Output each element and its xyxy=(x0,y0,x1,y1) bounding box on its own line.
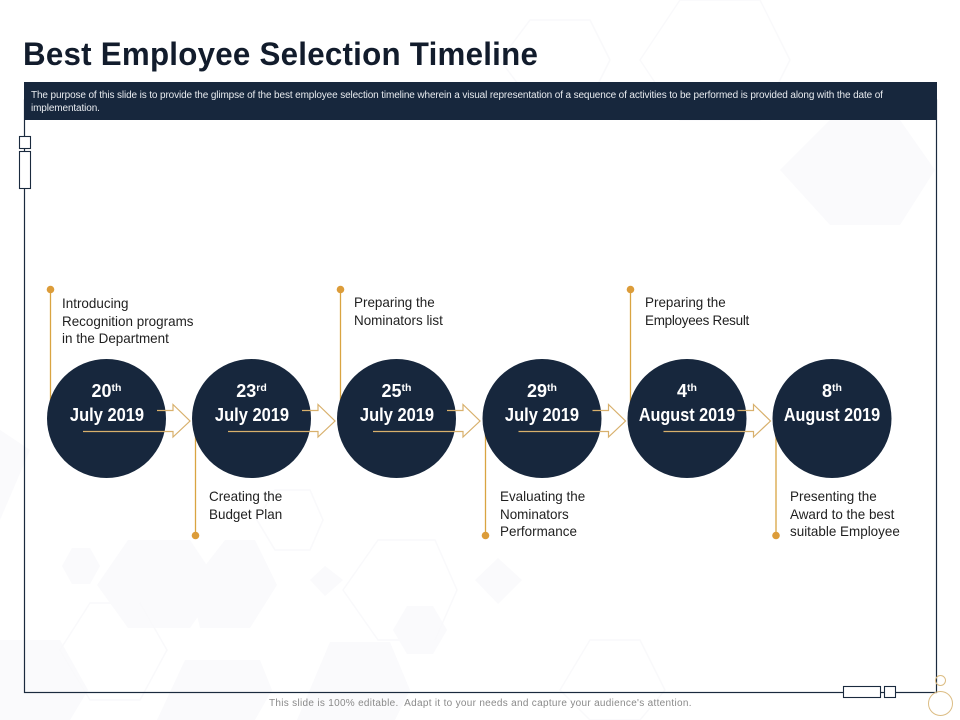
date 4: July 2019 xyxy=(505,405,579,425)
arrow 4 xyxy=(518,404,626,437)
footer note: This slide is 100% editable. Adapt it to your needs and capture your audience's attention. xyxy=(269,698,692,709)
step text 2: Creating the xyxy=(209,488,282,504)
date 1 xyxy=(69,381,144,425)
step text 1: Introducing xyxy=(62,295,129,311)
date 3 xyxy=(359,381,434,425)
step text 5 xyxy=(645,294,750,328)
date 6 xyxy=(784,381,880,425)
step text 5: Employees Result xyxy=(645,312,749,328)
date 5: August 2019 xyxy=(639,405,735,425)
date 4 xyxy=(505,381,579,425)
step text 2 xyxy=(209,488,282,522)
date 6: August 2019 xyxy=(784,405,880,425)
marker 1 xyxy=(47,286,54,405)
step text 2: Budget Plan xyxy=(209,506,282,522)
date 5: 4th xyxy=(677,381,697,401)
date 6: 8th xyxy=(822,381,842,401)
date 2: July 2019 xyxy=(214,405,289,425)
step text 1: Recognition programs xyxy=(62,313,193,329)
marker 5 xyxy=(627,286,634,405)
date 3: July 2019 xyxy=(359,405,434,425)
date 4: 29th xyxy=(527,381,557,401)
step text 6: Presenting the xyxy=(790,488,877,504)
circle 3 xyxy=(337,359,456,478)
circle 6 xyxy=(772,359,892,478)
circle 1 xyxy=(47,359,166,478)
step text 1: in the Department xyxy=(62,330,169,346)
title: Best Employee Selection Timeline xyxy=(23,36,538,72)
step text 1 xyxy=(62,295,193,346)
step text 4: Evaluating the xyxy=(500,488,585,504)
step text 4 xyxy=(500,488,585,539)
arrow 3 xyxy=(373,404,480,437)
step text 6: suitable Employee xyxy=(790,523,900,539)
step text 3: Preparing the xyxy=(354,294,435,310)
marker 2 xyxy=(192,430,199,539)
description banner: The purpose of this slide is to provide the glimpse of the best employee selection timeline wherein a visual representation of a sequence of activities to be performed is provided along with the date of xyxy=(31,90,883,101)
arrow 5 xyxy=(664,404,770,437)
date 3: 25th xyxy=(382,381,411,401)
arrow 1 xyxy=(83,404,190,437)
description banner xyxy=(24,82,937,120)
step text 3 xyxy=(354,294,443,328)
circle 5 xyxy=(628,359,746,478)
step text 6 xyxy=(790,488,900,539)
marker 6 xyxy=(772,430,780,539)
date 1: 20th xyxy=(92,381,121,401)
marker 3 xyxy=(337,286,344,405)
step text 5: Preparing the xyxy=(645,294,726,310)
step text 6: Award to the best xyxy=(790,506,894,522)
step text 4: Performance xyxy=(500,523,577,539)
description banner: implementation. xyxy=(31,103,100,114)
step text 3: Nominators list xyxy=(354,312,443,328)
date 1: July 2019 xyxy=(69,405,144,425)
arrow 2 xyxy=(228,404,335,437)
date 2: 23rd xyxy=(236,381,267,401)
marker 4 xyxy=(482,430,489,539)
date 2 xyxy=(214,381,289,425)
step text 4: Nominators xyxy=(500,506,569,522)
circle 4 xyxy=(482,359,602,478)
date 5 xyxy=(639,381,735,425)
circle 2 xyxy=(192,359,311,478)
